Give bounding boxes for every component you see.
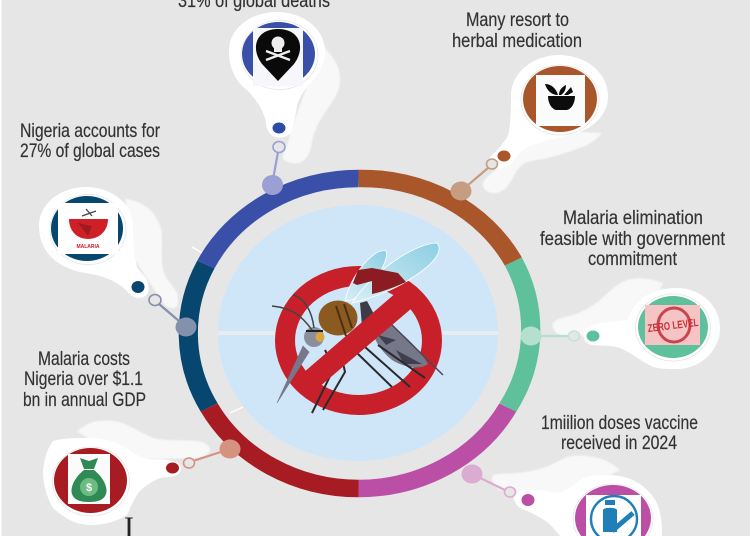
callout shadow bbox=[77, 421, 210, 460]
text: GDP: Nigeria over $1.1 bbox=[24, 368, 143, 390]
connector bbox=[193, 449, 230, 461]
pin dot bbox=[132, 281, 144, 293]
connector bbox=[272, 152, 278, 185]
connector bbox=[531, 335, 572, 337]
icon: money bag bbox=[68, 454, 110, 504]
mosquito proboscis and antennae bbox=[277, 346, 309, 403]
callout shadow bbox=[283, 45, 340, 163]
text: cases: Nigeria accounts for bbox=[20, 120, 160, 142]
pin dot bbox=[166, 462, 179, 474]
icon: money bag: $ bbox=[86, 482, 92, 494]
ring segment: dark red bbox=[209, 408, 358, 488]
no-mosquito illustration bbox=[272, 243, 443, 413]
icon: vaccine vial and syringe bbox=[586, 495, 641, 536]
mosquito wings bbox=[345, 243, 439, 303]
pin dot bbox=[498, 150, 510, 162]
text: cases: 27% of global cases bbox=[20, 140, 160, 162]
disc rim bbox=[52, 447, 130, 516]
icon disc bbox=[575, 485, 651, 536]
icon: Malaria bowl bbox=[58, 203, 118, 254]
prohibition ring bbox=[285, 276, 432, 405]
icon disc bbox=[638, 296, 708, 358]
text: elimination: commitment bbox=[588, 248, 677, 270]
connector bbox=[472, 474, 507, 491]
text: herbal: Many resort to bbox=[466, 9, 569, 31]
mosquito thorax bbox=[318, 300, 358, 336]
disc rim bbox=[50, 194, 126, 264]
prohibition slash bbox=[303, 292, 412, 388]
disc rim bbox=[573, 484, 653, 536]
text: elimination: feasible with government bbox=[540, 228, 725, 250]
central light-blue disc bbox=[192, 205, 498, 461]
pin dot bbox=[272, 122, 286, 134]
callout body bbox=[514, 475, 662, 536]
icon: mortar and herbs bbox=[536, 75, 585, 126]
callout shadow bbox=[553, 278, 663, 337]
mosquito legs bbox=[312, 345, 425, 413]
icon disc bbox=[51, 196, 123, 261]
ring segment: green bbox=[508, 262, 531, 408]
mosquito waist bbox=[360, 301, 376, 326]
disc rim bbox=[521, 65, 599, 135]
disc rim bbox=[636, 294, 710, 361]
disc rim bbox=[241, 20, 318, 90]
pin dot bbox=[522, 494, 534, 506]
callout shadow bbox=[492, 456, 620, 500]
text: vaccine: received in 2024 bbox=[561, 432, 677, 454]
icon disc bbox=[523, 66, 597, 132]
icon: skull pin bbox=[253, 28, 303, 86]
callout body bbox=[39, 187, 149, 298]
text: vaccine: 1miilion doses vaccine bbox=[541, 412, 698, 434]
callout: vaccine bbox=[462, 412, 698, 536]
connector bbox=[159, 304, 186, 327]
mosquito abdomen bbox=[372, 323, 428, 367]
text: herbal: herbal medication bbox=[452, 30, 582, 52]
text: GDP: bn in annual GDP bbox=[23, 389, 146, 411]
icon disc bbox=[242, 22, 315, 86]
mosquito head bbox=[304, 327, 324, 347]
ring segment: magenta bbox=[358, 408, 508, 488]
callout shadow bbox=[125, 199, 178, 308]
icon disc bbox=[54, 448, 127, 513]
callout: herbal medication bbox=[450, 9, 608, 200]
callout: elimination bbox=[520, 207, 725, 369]
connector bbox=[461, 168, 488, 191]
text: GDP: Malaria costs bbox=[38, 348, 130, 370]
callout: GDP cost bbox=[23, 348, 240, 525]
segmented ring bbox=[188, 178, 531, 488]
icon: zero level stamp: ZERO LEVEL bbox=[647, 317, 699, 335]
ring segment: brown bbox=[358, 178, 513, 262]
callout body bbox=[43, 438, 181, 525]
callout body bbox=[489, 55, 608, 169]
callout body bbox=[229, 12, 325, 138]
callout: global cases bbox=[20, 120, 196, 336]
icon: zero level stamp bbox=[645, 305, 700, 345]
icon: Malaria bowl: MALARIA bbox=[76, 244, 100, 250]
ring segment: navy bbox=[188, 264, 209, 408]
callout: global deaths bbox=[178, 0, 340, 195]
callout shadow bbox=[483, 130, 602, 193]
callout body bbox=[583, 288, 720, 369]
pin dot bbox=[586, 330, 600, 342]
text: elimination: Malaria elimination bbox=[563, 207, 703, 229]
ring segment: blue bbox=[206, 178, 358, 264]
